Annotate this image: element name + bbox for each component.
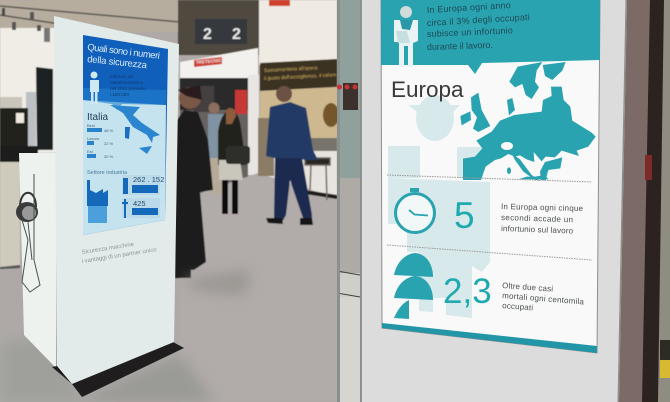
icon: headphones with cable (16, 174, 40, 292)
header text: subisce un infortunio (427, 25, 513, 39)
stopwatch caption: In Europa ogni cinque (501, 202, 584, 213)
screen intro text: nel 2011 passano (110, 86, 146, 91)
bezel caption: Sicurezza macchine (81, 242, 135, 256)
panel: exhibition hall photo: 2 (232, 26, 241, 43)
kiosk bezel (362, 0, 627, 402)
panel: exhibition hall photo: il gusto dell'accoglienza, il valore (264, 72, 337, 82)
sector label: Settore industria (87, 170, 128, 176)
panel: kiosk screen, Italy infographic (83, 35, 168, 235)
stats: 425 (133, 199, 146, 208)
hard hats caption: occupati (502, 301, 534, 312)
screen title: della sicurezza (87, 54, 148, 71)
panel: kiosk screen, Italy infographic: 22 % (104, 141, 114, 146)
header text: In Europa ogni anno (427, 0, 511, 15)
dividers (387, 175, 592, 182)
woman with bag (218, 108, 250, 214)
panel: exhibition hall photo: TRETECNICA (196, 57, 226, 65)
stats (122, 175, 164, 218)
screen title (87, 42, 160, 71)
stopwatch caption: secondi accade un (501, 213, 573, 224)
dark wall screen (36, 67, 53, 150)
screen intro text: i 100.000 (110, 92, 129, 97)
bezel caption: i vantaggi di un partner unico (81, 247, 158, 265)
panel: close-up background (337, 0, 670, 402)
man in blue suit (266, 86, 318, 225)
header text: durante il lavoro. (427, 40, 493, 52)
panel: kiosk screen, Italy infographic: 48 % (104, 128, 114, 133)
stopwatch caption: infortunio sul lavoro (501, 224, 574, 236)
stopwatch caption (501, 202, 584, 236)
panel: kiosk screen, Europe infographic (381, 0, 600, 353)
number: 5: 5 (454, 195, 475, 236)
floor shadow (0, 270, 250, 402)
screen intro text: Metalmeccanico (110, 80, 144, 85)
wall and poster (259, 0, 337, 65)
screen intro text: infortuni sul (110, 74, 134, 79)
heading: Europa: Europa (391, 77, 464, 102)
bars (87, 128, 102, 158)
screen intro text (110, 74, 146, 97)
hard hats caption: Oltre due casi (502, 281, 554, 294)
panel: exhibition hall photo: Sassamanteria all'opera (264, 65, 318, 74)
italy map (110, 105, 160, 143)
background visitor (258, 118, 274, 176)
teal footer band (382, 323, 597, 353)
kiosk base (52, 342, 184, 397)
header text (427, 0, 530, 52)
panel: kiosk screen, Italy infographic: Est (87, 149, 94, 154)
header text: circa il 3% degli occupati (427, 12, 530, 28)
number: 2,3: 2,3 (443, 272, 492, 311)
man in dark coat (175, 85, 213, 278)
stool (305, 158, 330, 200)
screen title: Quali sono i numeri (87, 42, 160, 62)
panel: kiosk screen, Italy infographic: 30 % (104, 154, 114, 159)
icon: stopwatch (396, 188, 434, 232)
kiosk totem body (54, 16, 179, 384)
panel: exhibition hall photo: 2 (203, 26, 212, 43)
faded background worker figure (388, 95, 490, 318)
icon: factory (87, 180, 108, 206)
panel: kiosk screen, Italy infographic: Lavoro (87, 136, 100, 141)
teal header band (381, 0, 600, 74)
heading: Italia: Italia (87, 112, 109, 123)
booth ceiling and stands (178, 0, 260, 55)
icon: hard hats pictogram (394, 253, 433, 319)
hard hats caption (502, 281, 585, 312)
icon: injured worker (90, 72, 99, 104)
hard hats caption: mortali ogni centomila (502, 291, 585, 306)
panel: kiosk screen, Italy infographic: Beni (87, 123, 95, 128)
stats: 262 . 152 (133, 175, 164, 184)
side cabinet (19, 153, 56, 368)
europe map (460, 62, 596, 181)
panel: exhibition hall photo (0, 0, 339, 402)
icon: injured worker (394, 6, 418, 67)
